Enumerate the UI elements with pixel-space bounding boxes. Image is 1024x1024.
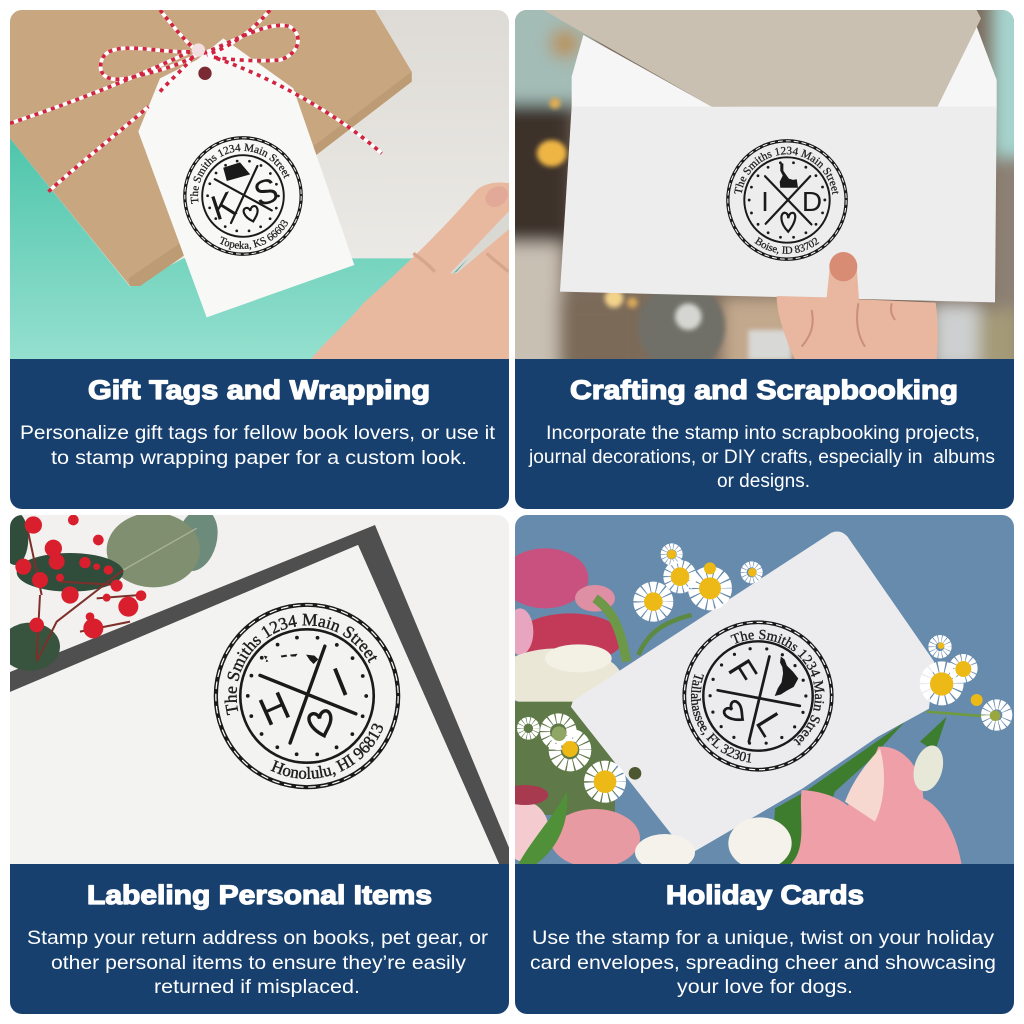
caption band xyxy=(10,359,509,509)
stamp: Boise ID: I xyxy=(761,186,769,217)
panel: holiday cards xyxy=(515,515,1014,1014)
body text: Incorporate the stamp into scrapbooking projects, xyxy=(546,422,980,444)
caption band xyxy=(515,864,1014,1014)
body text: other personal items to ensure they’re easily xyxy=(51,952,466,974)
body text: card envelopes, spreading cheer and showcasing xyxy=(530,952,996,974)
stamp: Topeka KS: S xyxy=(249,170,283,214)
body text: or designs. xyxy=(717,470,810,492)
stamp: Topeka KS: K xyxy=(206,184,241,228)
stamp: Topeka KS: The Smiths 1234 Main Street xyxy=(190,143,290,204)
stamp: Honolulu HI xyxy=(214,602,400,790)
stamp: Boise ID: The Smiths 1234 Main Street xyxy=(734,146,839,195)
caption band xyxy=(515,359,1014,509)
stamp: Tallahassee FL xyxy=(682,620,834,772)
stamp: Topeka KS xyxy=(183,136,303,256)
body text: Stamp your return address on books, pet gear, or xyxy=(27,927,489,949)
body text: returned if misplaced. xyxy=(154,976,360,998)
body text: your love for dogs. xyxy=(677,976,853,998)
body text: to stamp wrapping paper for a custom look. xyxy=(51,447,467,469)
body text: Personalize gift tags for fellow book lovers, or use it xyxy=(20,422,496,444)
stamp: Boise ID xyxy=(726,139,848,261)
panel: crafting and scrapbooking xyxy=(515,10,1014,509)
body text: journal decorations, or DIY crafts, especially in albums xyxy=(528,446,995,468)
photo: card among flowers xyxy=(495,515,1015,871)
heading: Holiday Cards: Holiday Cards xyxy=(666,880,864,910)
panel: gift tags and wrapping xyxy=(10,10,509,509)
stamp: Tallahassee FL: F xyxy=(720,653,764,691)
panel: labeling personal items xyxy=(10,515,509,1014)
stamp: Tallahassee FL: L xyxy=(748,706,791,743)
heading: Crafting and Scrapbooking: Crafting and Scrapbooking xyxy=(570,375,958,405)
photo: envelope with holiday bokeh xyxy=(515,10,1014,359)
photo: gift tag on kraft box xyxy=(10,10,512,360)
heading: Gift Tags and Wrapping: Gift Tags and Wrapping xyxy=(88,375,430,405)
body text: Use the stamp for a unique, twist on your holiday xyxy=(532,927,994,949)
caption band xyxy=(10,864,509,1014)
photo: notebook with botanicals xyxy=(0,504,510,864)
stamp: Topeka KS: Topeka, KS 66603 xyxy=(220,220,288,250)
stamp: Tallahassee FL: Tallahassee, FL 32301 xyxy=(690,674,752,763)
body text xyxy=(20,422,496,469)
stamp: Tallahassee FL: The Smiths 1234 Main Street xyxy=(730,630,824,746)
body text xyxy=(528,422,995,492)
heading: Labeling Personal Items: Labeling Personal Items xyxy=(87,880,432,910)
stamp: Honolulu HI: The Smiths 1234 Main Street xyxy=(224,614,378,716)
stamp: Honolulu HI: H xyxy=(253,683,297,735)
body text xyxy=(27,927,489,998)
stamp: Honolulu HI: Honolulu, HI 96813 xyxy=(270,724,383,779)
stamp: Boise ID: D xyxy=(802,186,822,217)
stamp: Boise ID: Boise, ID 83702 xyxy=(754,236,820,254)
stamp: Honolulu HI: I xyxy=(326,658,354,705)
body text xyxy=(530,927,996,998)
